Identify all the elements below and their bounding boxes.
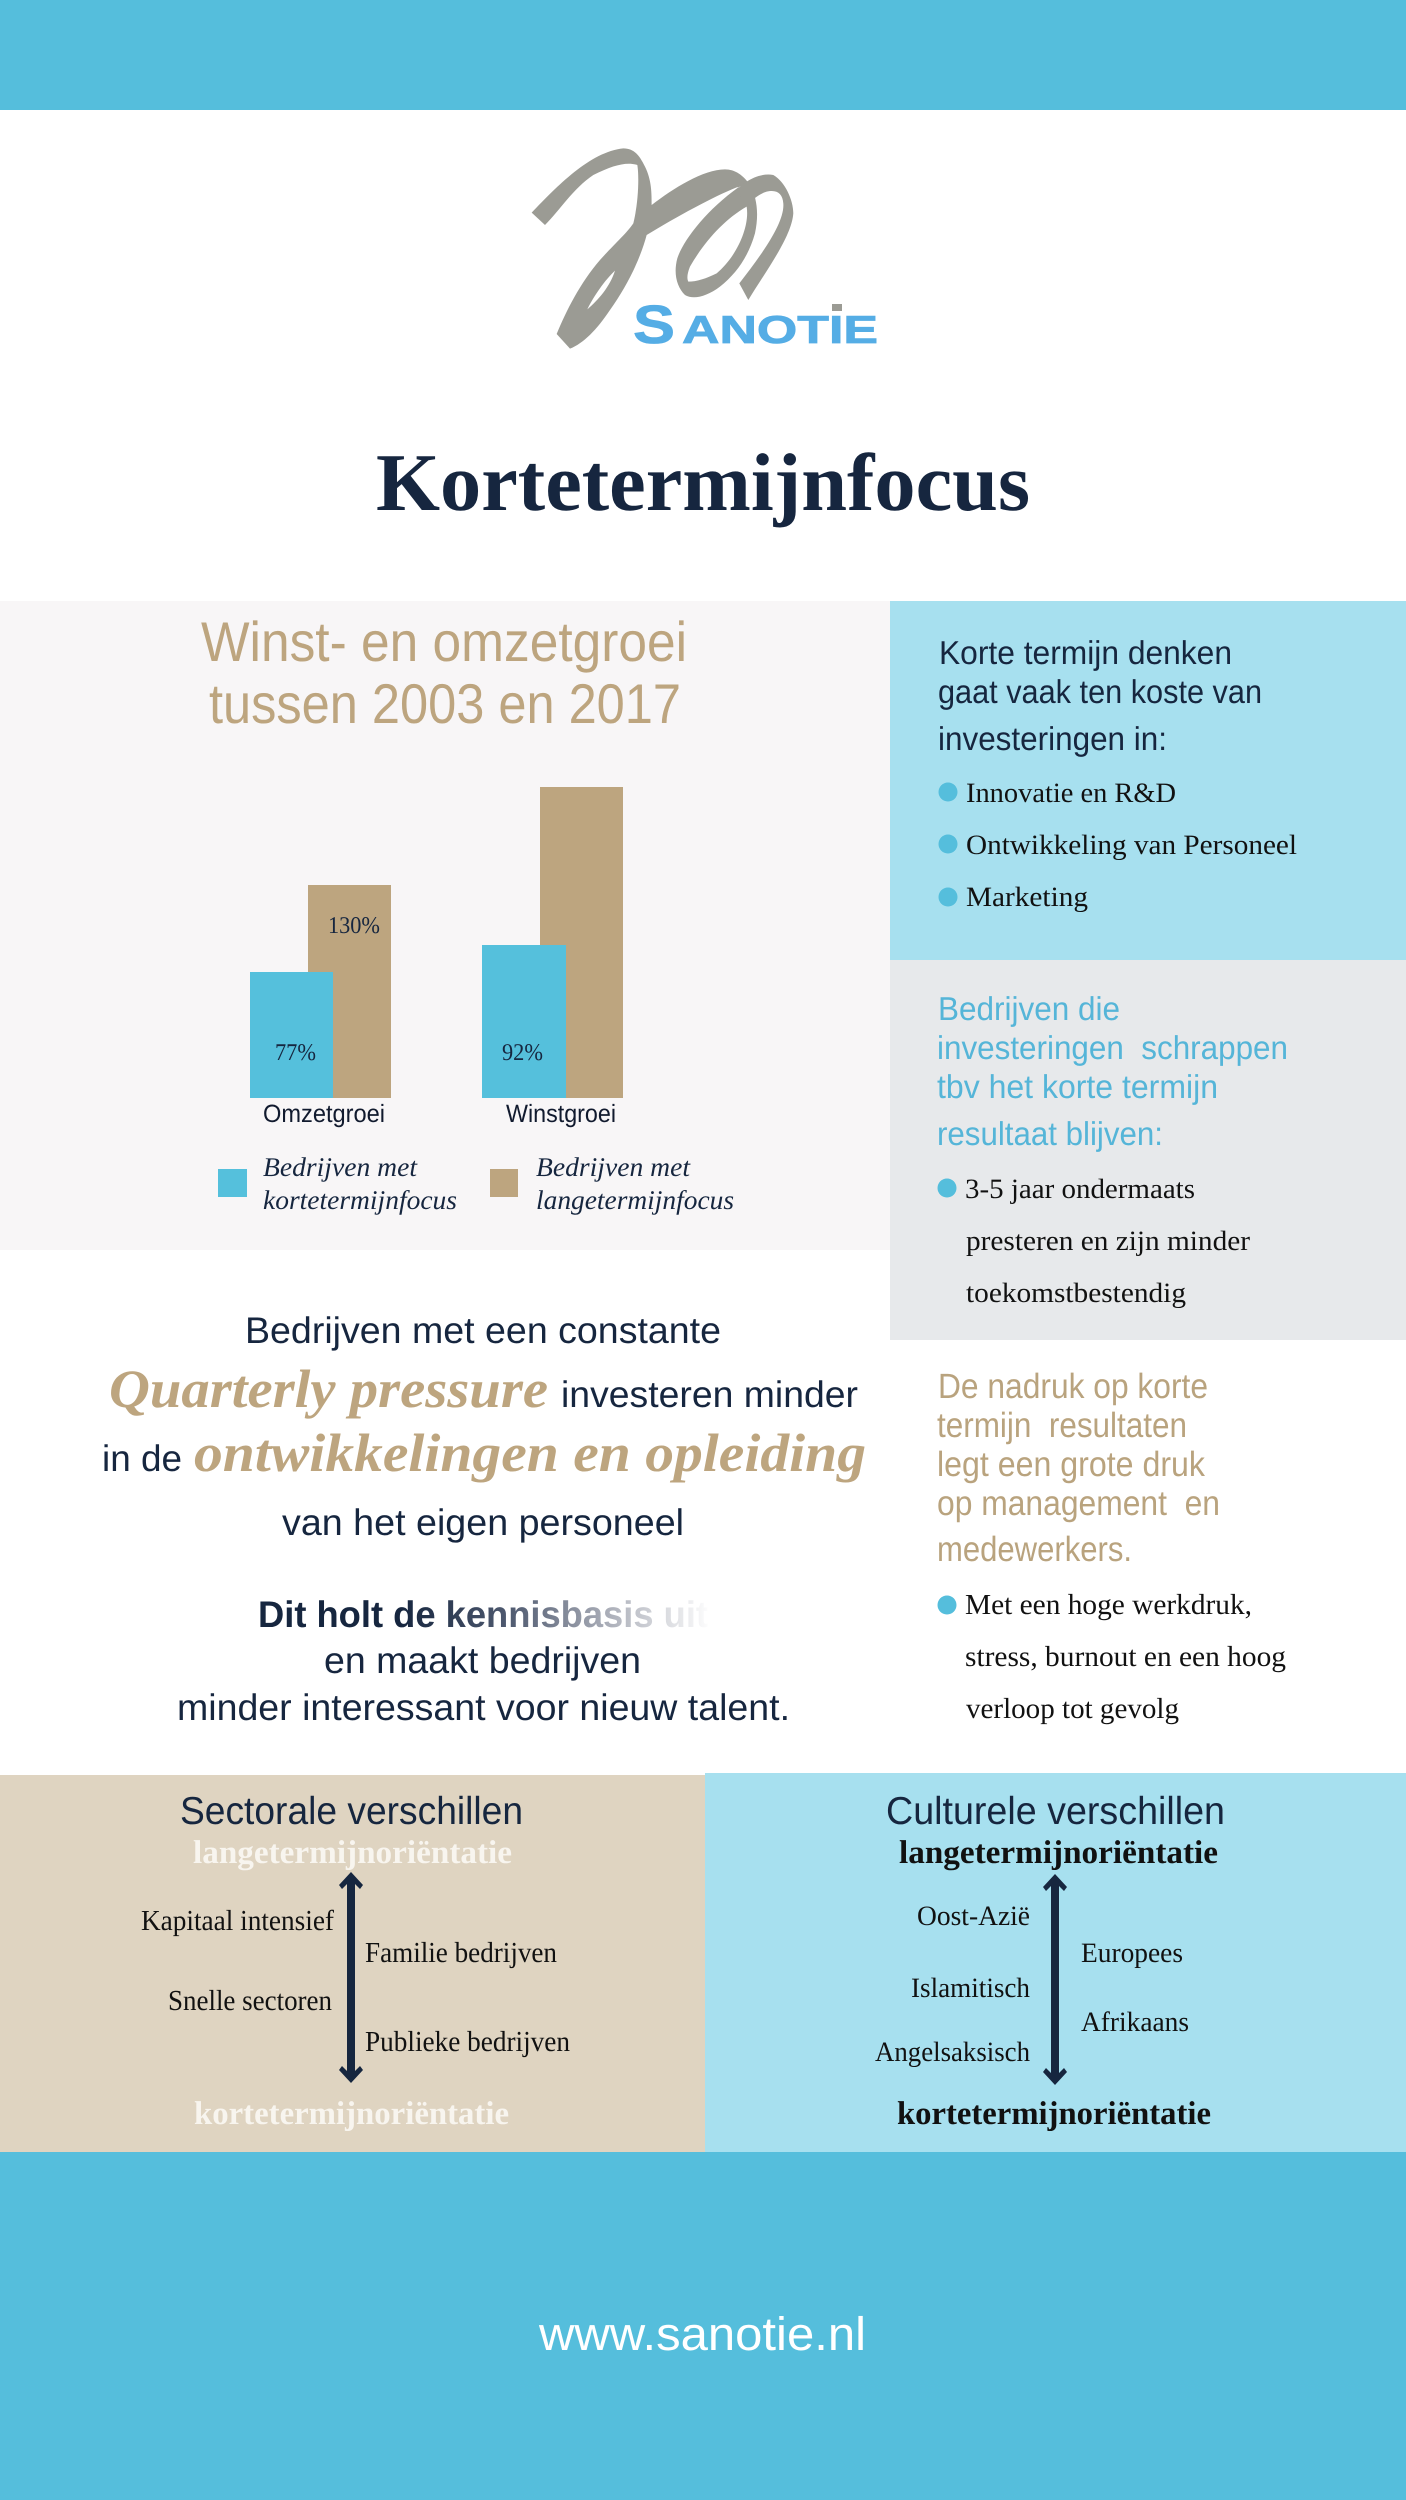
bullet list: Marketing	[966, 882, 1088, 913]
wordmark: ANOTIE	[682, 309, 878, 352]
bar chart: Omzetgroei	[263, 1100, 385, 1128]
panel: pressure on staff	[937, 1367, 1286, 1725]
text block: knowledge base	[177, 1594, 790, 1728]
bullet list	[938, 778, 1297, 913]
chart heading: tussen 2003 en 2017	[209, 672, 681, 735]
panel: growth chart	[0, 601, 890, 1250]
panel heading: De nadruk op korte	[938, 1367, 1208, 1406]
website url: www.sanotie.nl	[538, 2307, 866, 2360]
axis items: Oost-Azië	[917, 1901, 1030, 1932]
panel: cultural differences	[705, 1773, 1406, 2153]
bullet text	[938, 1589, 1286, 1725]
text block: quarterly pressure: ontwikkelingen en opleiding	[194, 1423, 866, 1483]
title: Kortetermijnfocus	[376, 437, 1030, 528]
panel heading: Bedrijven die	[938, 990, 1120, 1027]
bar chart: 130%	[328, 913, 380, 939]
axis label bottom: kortetermijnoriëntatie	[194, 2096, 509, 2132]
arrow: double vertical	[1043, 1874, 1067, 2085]
text block: quarterly pressure: Bedrijven met een constante	[245, 1310, 721, 1351]
bar chart: 92%	[502, 1040, 543, 1066]
panel heading: investeringen in:	[938, 720, 1167, 757]
icon: ribbon monogram	[532, 148, 793, 349]
axis items	[875, 1901, 1189, 2068]
panel heading: gaat vaak ten koste van	[938, 673, 1262, 710]
wordmark	[633, 295, 878, 355]
text block: knowledge base: Dit holt de kennisbasis uit	[258, 1594, 708, 1635]
bullet text: stress, burnout en een hoog	[965, 1641, 1286, 1673]
legend	[218, 1152, 734, 1215]
panel: short-term investments	[890, 601, 1406, 960]
panel heading: Culturele verschillen	[886, 1790, 1225, 1833]
logo: Sanotie	[532, 148, 878, 355]
bullet list: Ontwikkeling van Personeel	[966, 830, 1297, 861]
bullet text: verloop tot gevolg	[966, 1693, 1179, 1725]
footer band	[0, 2152, 1406, 2500]
axis items: Islamitisch	[911, 1973, 1030, 2004]
panel heading: resultaat blijven:	[937, 1115, 1163, 1152]
axis items: Familie bedrijven	[365, 1937, 557, 1969]
panel heading: tbv het korte termijn	[937, 1068, 1218, 1105]
chart heading	[201, 610, 687, 735]
legend: langetermijnfocus	[536, 1185, 734, 1215]
axis label top: langetermijnoriëntatie	[193, 1835, 512, 1871]
bullet text: toekomstbestendig	[966, 1278, 1186, 1309]
panel heading: medewerkers.	[937, 1530, 1132, 1569]
axis label bottom: kortetermijnoriëntatie	[897, 2096, 1211, 2132]
text block: quarterly pressure	[102, 1310, 866, 1543]
legend: Bedrijven met	[536, 1152, 692, 1182]
legend: kortetermijnfocus	[263, 1185, 457, 1215]
panel heading: Korte termijn denken	[939, 634, 1232, 671]
panel heading: termijn resultaten	[937, 1406, 1187, 1445]
bar chart: Winstgroei	[506, 1100, 616, 1128]
axis items	[141, 1905, 570, 2058]
legend: Bedrijven met	[263, 1152, 419, 1182]
panel heading: legt een grote druk	[937, 1445, 1205, 1484]
axis items: Europees	[1081, 1938, 1183, 1969]
text block: quarterly pressure: in de	[102, 1438, 182, 1479]
axis items: Snelle sectoren	[168, 1985, 332, 2017]
bar chart	[250, 787, 623, 1128]
wordmark: S	[633, 295, 675, 355]
panel heading	[938, 634, 1262, 757]
text block: knowledge base: en maakt bedrijven	[324, 1640, 641, 1681]
text block: quarterly pressure: investeren minder	[561, 1374, 858, 1415]
axis label top: langetermijnoriëntatie	[899, 1835, 1218, 1871]
axis items: Afrikaans	[1081, 2007, 1189, 2038]
bullet text	[938, 1174, 1251, 1309]
text block: quarterly pressure: van het eigen personeel	[282, 1502, 684, 1543]
axis items: Kapitaal intensief	[141, 1905, 334, 1937]
panel heading: investeringen schrappen	[937, 1029, 1288, 1066]
bullet text: Met een hoge werkdruk,	[965, 1589, 1252, 1621]
axis items: Angelsaksisch	[875, 2037, 1030, 2068]
text block: knowledge base: minder interessant voor nieuw talent.	[177, 1687, 790, 1728]
bar chart: 77%	[275, 1040, 316, 1066]
chart heading: Winst- en omzetgroei	[201, 610, 687, 673]
panel heading	[937, 990, 1288, 1152]
panel heading	[937, 1367, 1220, 1569]
bullet text: 3-5 jaar ondermaats	[965, 1174, 1195, 1205]
arrow: double vertical	[339, 1872, 363, 2083]
top band	[0, 0, 1406, 110]
bullet text: presteren en zijn minder	[966, 1226, 1251, 1257]
panel: cutting investments	[890, 960, 1406, 1340]
panel: sectoral differences	[0, 1775, 705, 2153]
panel heading: Sectorale verschillen	[180, 1790, 523, 1833]
axis items: Publieke bedrijven	[365, 2026, 570, 2058]
icon: grey i-dot	[832, 304, 842, 311]
text block: quarterly pressure: Quarterly pressure	[109, 1359, 548, 1419]
panel heading: op management en	[937, 1484, 1220, 1523]
bullet list: Innovatie en R&D	[966, 778, 1176, 809]
